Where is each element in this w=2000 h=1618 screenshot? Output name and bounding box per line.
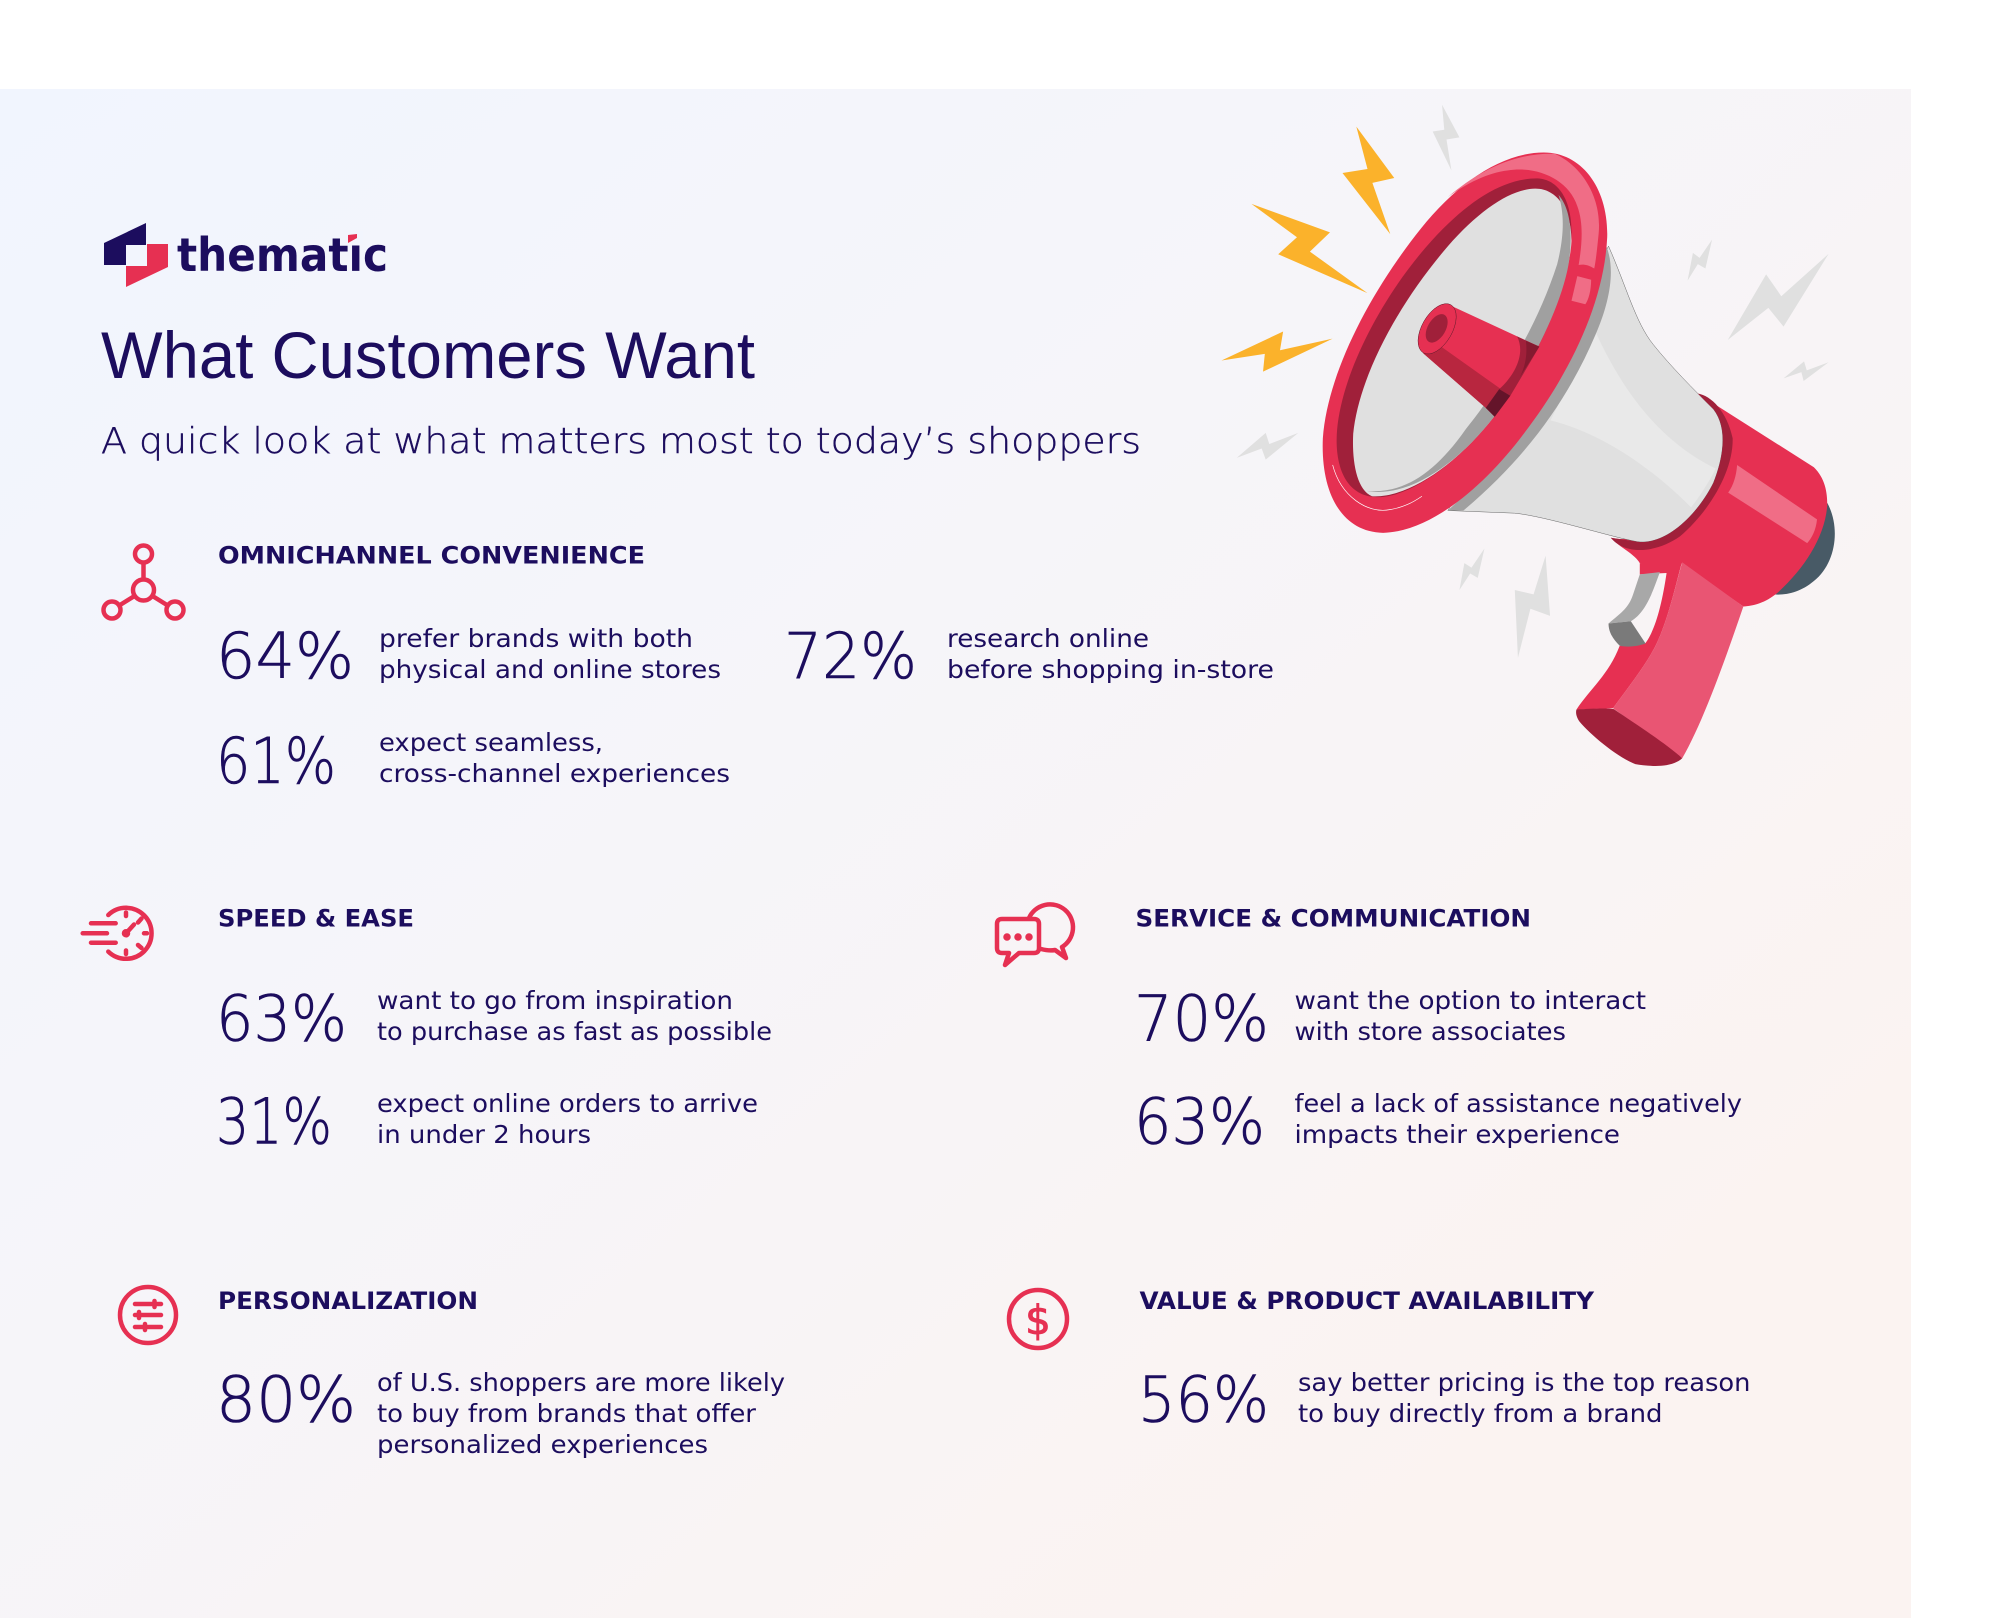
trigger xyxy=(1609,572,1660,647)
logo: thematic xyxy=(104,223,388,287)
stat: 72% xyxy=(784,620,1274,693)
stat: 63%: feel a lack of assistance negatively xyxy=(1294,1089,1742,1118)
stat: 31%: expect online orders to arrive xyxy=(377,1089,758,1118)
stat: 63%: 63% xyxy=(1134,1086,1265,1158)
icon: grey lightning bolts xyxy=(1237,105,1829,658)
section: personalization xyxy=(120,1287,785,1459)
icon: sliders in circle xyxy=(120,1287,176,1343)
stat: 61%: cross-channel experiences xyxy=(379,759,730,788)
section: service and communication xyxy=(997,904,1742,1158)
stat: 31%: in under 2 hours xyxy=(377,1120,591,1149)
stat: 80% xyxy=(216,1364,785,1459)
nozzle xyxy=(1410,297,1539,417)
heading: OMNICHANNEL CONVENIENCE xyxy=(218,542,645,570)
horn rim xyxy=(1323,152,1607,533)
stat: 63%: impacts their experience xyxy=(1294,1120,1620,1149)
heading: SPEED & EASE xyxy=(218,904,414,932)
stat: 72%: research online xyxy=(947,624,1149,653)
heading: SERVICE & COMMUNICATION xyxy=(1136,904,1531,932)
collar xyxy=(1611,394,1733,550)
stat: 56%: to buy directly from a brand xyxy=(1298,1399,1662,1428)
stat: 61%: expect seamless, xyxy=(379,728,603,757)
horn xyxy=(1448,246,1723,542)
icon: network nodes xyxy=(104,546,184,618)
stat: 63% xyxy=(216,982,772,1056)
stat: 56% xyxy=(1138,1364,1750,1436)
logo: thematic: thematic xyxy=(177,228,388,282)
stat: 31%: 31% xyxy=(216,1086,332,1158)
icon: dollar in circle: $ xyxy=(1025,1298,1051,1344)
icon: chat bubbles xyxy=(997,904,1073,965)
stat: 56%: say better pricing is the top reason xyxy=(1298,1368,1750,1397)
icon: stopwatch with speed lines xyxy=(83,908,152,959)
stat: 56%: 56% xyxy=(1138,1364,1269,1436)
heading: VALUE & PRODUCT AVAILABILITY xyxy=(1140,1287,1595,1315)
stat: 64%: 64% xyxy=(216,620,354,693)
stat: 64% xyxy=(216,620,721,693)
stat: 64%: prefer brands with both xyxy=(379,624,693,653)
stat: 63%: to purchase as fast as possible xyxy=(377,1017,772,1046)
stat: 70%: want the option to interact xyxy=(1294,986,1646,1015)
icon: yellow lightning bolts xyxy=(1222,127,1394,372)
icon: dollar in circle xyxy=(1009,1290,1067,1348)
section: speed and ease xyxy=(83,904,772,1158)
stat: 63%: 63% xyxy=(216,982,347,1056)
stat: 72%: before shopping in-store xyxy=(947,655,1274,684)
stat: 61% xyxy=(216,725,730,798)
horn interior xyxy=(1353,189,1572,496)
stat: 80%: to buy from brands that offer xyxy=(377,1399,757,1428)
section: value and product availability xyxy=(1009,1287,1750,1436)
stat: 70%: with store associates xyxy=(1294,1017,1566,1046)
section: omnichannel convenience xyxy=(104,542,1274,798)
megaphone rear cap xyxy=(1774,503,1835,595)
heading: PERSONALIZATION xyxy=(218,1287,478,1315)
subtitle: A quick look at what matters most to today’s shoppers xyxy=(101,421,1141,462)
megaphone illustration xyxy=(1222,105,1835,766)
stat: 61%: 61% xyxy=(216,725,336,798)
stat: 63%: want to go from inspiration xyxy=(377,986,733,1015)
handle xyxy=(1576,561,1743,766)
stat: 63% xyxy=(1134,1086,1742,1158)
stat: 80%: of U.S. shoppers are more likely xyxy=(377,1368,785,1397)
megaphone body xyxy=(1611,394,1827,606)
stat: 64%: physical and online stores xyxy=(379,655,721,684)
title: What Customers Want xyxy=(101,318,755,392)
stat: 80%: personalized experiences xyxy=(377,1430,708,1459)
stat: 70% xyxy=(1134,982,1646,1056)
body highlight xyxy=(1728,465,1817,543)
stat: 70%: 70% xyxy=(1134,982,1269,1056)
stat: 80%: 80% xyxy=(216,1364,356,1436)
stat: 31% xyxy=(216,1086,758,1158)
stat: 72%: 72% xyxy=(784,620,917,693)
